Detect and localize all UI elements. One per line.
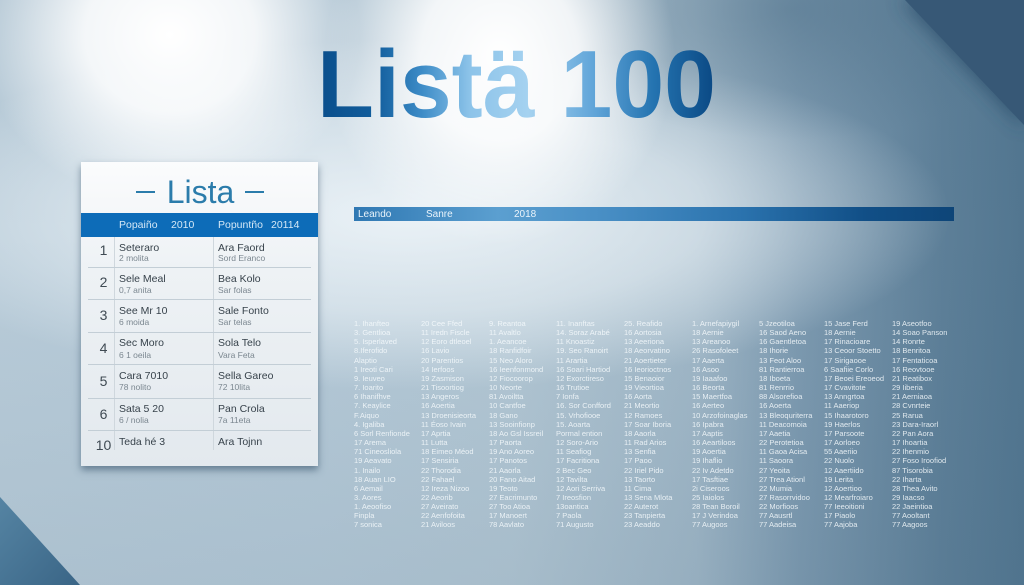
panel: lista table: 72 10lita (218, 382, 250, 392)
list column 9: 19 Aseotfoo 14 Soao Panson 14 Ronrte 18 Benritoa 17 Fentaticoa 16 Reovtooe 21 Reatibox 29 Iiberia 21 Aerniaoa 28 Cvnrteie 25 Rarua 23 Dara-Iraorl 22 Pan Aora 17 Ihoartia 22 Ihenmio 27 Foso Iroofiod 87 Tisorobia 22 Iharta 28 Thea Avito 29 Iaacso 22 Jaeintioa 77 Aooltant 77 Aagoos (892, 319, 947, 529)
legend bar: 2018 (514, 209, 536, 220)
panel: lista table: Sar telas (218, 317, 252, 327)
legend bar: Leando (358, 209, 391, 220)
panel: lista table: 5 (100, 373, 107, 389)
panel: lista table: Sar folas (218, 285, 252, 295)
panel: lista table: Cara 7010 (119, 370, 168, 382)
panel: lista table: Ara Faord (218, 242, 265, 254)
panel: lista table: See Mr 10 (119, 305, 167, 317)
list column 1: 1. Ihanfteo 3. Gentlioa 5. Isperlaved 8.Iferofido Alaptio 1 Ireoti Cari 9. Ieuveo 7. Ioarito 6 Ihanifhve 7. Keaylice F.Aiquo 4. Igaliba 6 Sorl Renfionde 17 Arema 71 Cineosliola 19 Aeavato 1. Inailo 18 Auan LIO 6 Aemail 3. Aores 1. Aeoofiso Finpla 7 sonica (354, 319, 410, 529)
row 5 (100, 370, 273, 392)
panel: lista table: Sele Meal (119, 273, 166, 285)
panel: lista table (81, 162, 318, 466)
panel: lista table: 4 (100, 340, 107, 356)
legend bar: Sanre (426, 209, 453, 220)
list column 3: 9. Reantoa 11 Avaltlo 1. Aeancoe 18 Ranfidfoir 15 Neo Aloro 16 Ieenfonmond 12 Fiocoorop 10 Neorte 81 Avoiltta 10 Cantfoe 18 Gano 13 Sooinfionp 18 Ao Gsl Issreil 17 Paorta 19 Ano Aoreo 17 Panotos 21 Aaorla 20 Fano Aitad 19 Teoto 27 Eacrimunto 27 Too Atioa 17 Manoert 78 Aavlato (489, 319, 543, 529)
left dash (136, 191, 155, 193)
panel: lista table: 6 1 oeila (119, 350, 151, 360)
right dash (245, 191, 264, 193)
list column 4: 11. Inanftas 14. Soraz Arabé 11 Knoastiz 19. Seo Ranoirt 11 Arartia 16 Soari Hartiod 12 Exorctireso 16 Trutioe 7 Ionfa 16. Sor Confford 15. Vrhofiooe 15. Aoarta Pormal ention 12 Soro-Ario 11 Seafiog 17 Facritiona 2 Bec Geo 12 Tavilta 12 Aori Serriva 7 Ireosfion 13oantica 7 Paola 71 Augusto (556, 319, 611, 529)
table title: Lista (167, 174, 234, 210)
panel: lista table: Vara Feta (218, 350, 255, 360)
panel: lista table: Sella Gareo (218, 370, 273, 382)
panel: lista table: 7a 11eta (218, 415, 250, 425)
list column 7: 5 Jzeotiloa 16 Saod Aeno 16 Gaentletoa 18 Ihorie 13 Feot Aloo 81 Rantierroa 18 Iboeta 81 Renrrio 88 Alsorefioa 16 Aoerta 13 Bleoquriterra 11 Deacomoia 17 Aaetia 22 Perotetioa 11 Gaoa Acisa 11 Saoora 27 Yeoita 27 Trea Ationl 22 Mumia 27 Rasorrvidoo 22 Morfioos 77 Aausrtl 77 Aadeisa (759, 319, 812, 529)
panel: lista table: Bea Kolo (218, 273, 261, 285)
panel: lista table: 2 molita (119, 253, 149, 263)
list column 6: 1. Arnefapiygil 18 Aernie 13 Areanoo 26 Rasofoleet 17 Aaerta 16 Asoo 19 Iaaafoo 16 Beorta 15 Maertfoa 16 Aerteo 10 Arzofoinaglas 16 Ipabra 17 Aaptis 16 Aeartiloos 19 Aoertia 19 Ihaflio 22 Iv Adetdo 17 Tasftiae 2i Ciseroos 25 Iaiolos 28 Tean Boroil 17 J Verindoa 77 Augoos (692, 319, 747, 529)
panel: lista table: Sord Eranco (218, 253, 265, 263)
row 1 (100, 242, 265, 263)
panel: lista table: 6 (100, 406, 107, 422)
panel: lista table: 0,7 anita (119, 285, 152, 295)
list column 2: 20 Cee Ffed 11 Iredn Fiscle 12 Eoro dtleoel 16 Lavio 20 Parentios 14 Ierfoos 19 Zasmison 21 Tisoortiog 13 Angeros 16 Aoertia 13 Droenisieorta 11 Éoso Ivain 17 Aprtia 11 Lutta 18 Eimeo Méod 17 Sensiria 22 Thorodia 22 Fahael 12 Ireza Nizoo 22 Aeorib 27 Aveirato 22 Aenfofoita 21 Aviloos (421, 319, 476, 529)
list column 5: 25. Reafido 16 Aortosia 13 Aeeriona 18 Aeorvatino 21 Aoertieter 16 Ieorioctnos 15 Benaoior 19 Vieortioa 16 Aorta 21 Meortio 12 Ramoes 17 Soar Iboria 18 Aaorla 11 Rad Arios 13 Senfia 17 Paoo 22 Iriel Pido 13 Taorto 11 Cima 13 Sena Mlota 22 Auterot 23 Tanpierta 23 Aeaddo (624, 319, 672, 529)
panel: lista table: Sola Telo (218, 337, 261, 349)
panel: lista table: 6 moida (119, 317, 149, 327)
panel: lista table: Seteraro (119, 242, 159, 254)
row 10 (96, 436, 262, 453)
panel: lista table: 3 (100, 307, 107, 323)
title: Listä 100 (317, 31, 716, 138)
panel: lista table: 6 / nolia (119, 415, 149, 425)
panel: lista table: 10 (96, 437, 111, 453)
list column 8: 15 Jase Ferd 18 Aernie 17 Rinacioare 13 Ceoor Stoetto 17 Sirigaooe 6 Saafiie Corlo 17 Beoei Ereoeod 17 Cvavitote 13 Anngrtoa 11 Aaeriop 15 Ihaarotoro 19 Haerlos 17 Parsoote 17 Aorloeo 55 Aaeriio 22 Nuolo 12 Aaertiido 19 Lerita 12 Aoertioo 12 Mearfroiaro 77 Ieeoitioni 17 Piaolo 77 Aajoba (824, 319, 884, 529)
row 6 (100, 403, 265, 425)
panel: lista table: Ara Tojnn (218, 436, 262, 448)
legend bar (354, 207, 954, 221)
table header (81, 213, 318, 237)
row 3 (100, 305, 269, 327)
panel: lista table: Sec Moro (119, 337, 164, 349)
panel: lista table: 2 (100, 274, 107, 290)
panel: lista table: Teda hé 3 (119, 436, 165, 448)
panel: lista table: Pan Crola (218, 403, 265, 415)
table header: Popuntño (218, 219, 263, 231)
table header: 20114 (271, 219, 299, 231)
panel: lista table: 78 nolito (119, 382, 151, 392)
row 2 (100, 273, 261, 295)
panel: lista table: 1 (100, 242, 107, 258)
row 4 (100, 337, 261, 360)
panel: lista table: Sata 5 20 (119, 403, 164, 415)
panel: lista table: Sale Fonto (218, 305, 269, 317)
table header: Popaiño (119, 219, 158, 231)
table header: 2010 (171, 219, 194, 231)
